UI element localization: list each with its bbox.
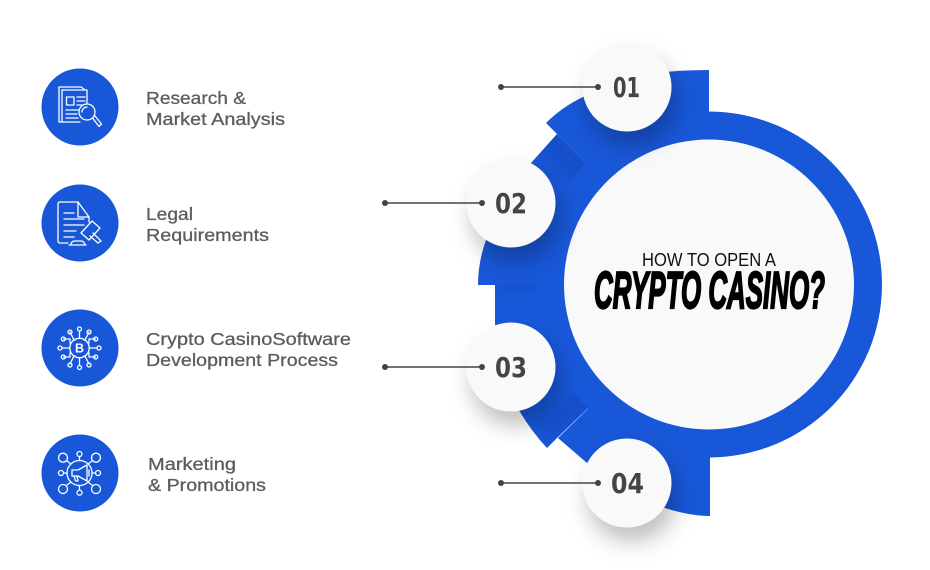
number 04 [498, 438, 672, 528]
blue segment 4 [558, 390, 710, 516]
blue segment 2 [478, 134, 605, 285]
centre circle [564, 140, 854, 430]
label: marketing: & Promotions [148, 475, 266, 495]
blue segment 3 [495, 285, 607, 448]
label: legal: Requirements [146, 225, 269, 245]
icon: legal document with gavel [42, 184, 118, 262]
number 02: 02 [495, 187, 527, 220]
connector 01 [498, 84, 601, 90]
blue segment 1 [546, 70, 709, 182]
number 04: 04 [611, 467, 644, 500]
blue ring [536, 112, 882, 458]
number 01 [498, 42, 672, 132]
label: research: Market Analysis [146, 109, 285, 129]
label: marketing [148, 454, 266, 495]
label: legal [146, 204, 269, 245]
bitcoin symbol: B [75, 342, 84, 356]
number 01: 01 [613, 71, 640, 104]
connector 02 [382, 200, 485, 206]
number 02 [382, 158, 556, 248]
label: software: Development Process [146, 350, 338, 370]
connector 04 [498, 480, 601, 486]
label: research: Research & [146, 88, 246, 108]
label: software [146, 329, 351, 370]
label: marketing: Marketing [148, 454, 236, 474]
icon: megaphone network [42, 434, 118, 512]
label: research [146, 88, 285, 129]
number 03: 03 [495, 351, 527, 384]
icon: bitcoin network [42, 310, 118, 386]
label: software: Crypto CasinoSoftware [146, 329, 351, 349]
icon: research document with magnifier [42, 68, 118, 146]
label: legal: Legal [146, 204, 193, 224]
connector 03 [382, 364, 485, 370]
title line 1: HOW TO OPEN A [642, 250, 776, 270]
number 03 [382, 322, 556, 412]
